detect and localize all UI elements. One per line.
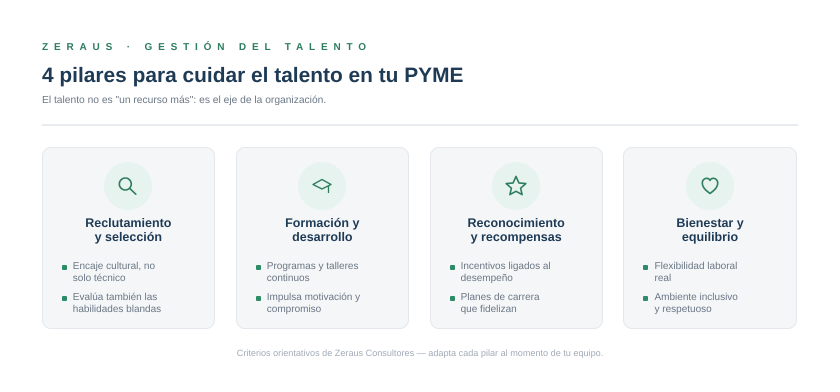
eyebrow: ZERAUS · GESTIÓN DEL TALENTO (42, 42, 372, 52)
heading: bienestar: Bienestar y (676, 216, 744, 230)
bullet text 1: Incentivos ligados al (461, 261, 551, 272)
bullet text 1: real (654, 273, 671, 284)
heading: reconocimiento (468, 216, 565, 244)
bullet text 2: Evalúa también las (73, 292, 157, 303)
bullet text 1: Flexibilidad laboral (654, 261, 737, 272)
subtitle: El talento no es "un recurso más": es el eje de la organización. (42, 95, 326, 106)
bullet text 2 (73, 292, 161, 315)
icon: graduation cap (298, 162, 346, 210)
bullet text 2: que fidelizan (461, 304, 517, 315)
bullet text 1 (461, 261, 551, 284)
panel: reconocimiento y recompensas (430, 147, 603, 329)
bullet text 2 (654, 292, 738, 315)
bullet text 2: Ambiente inclusivo (654, 292, 738, 303)
heading: reclutamiento: Reclutamiento (85, 216, 171, 230)
footer note: Criterios orientativos de Zeraus Consultores — adapta cada pilar al momento de tu equipo. (237, 348, 603, 358)
bullet text 2: Impulsa motivación y (267, 292, 360, 303)
title: 4 pilares para cuidar el talento en tu PYME (42, 64, 463, 87)
heading: reclutamiento: y selección (95, 230, 162, 244)
bullet text 2: y respetuoso (654, 304, 712, 315)
bullet text 2: habilidades blandas (73, 304, 161, 315)
icon: star (492, 162, 540, 210)
panel: reclutamiento y selección (42, 147, 215, 329)
heading: formación: desarrollo (292, 230, 353, 244)
bullet text 1: desempeño (461, 273, 513, 284)
panel: bienestar y equilibrio (623, 147, 797, 329)
heading: bienestar (676, 216, 744, 244)
bullet text 1: Programas y talleres (267, 261, 358, 272)
bullet text 1: solo técnico (73, 273, 126, 284)
heading: reconocimiento: Reconocimiento (468, 216, 565, 230)
bullet text 2: compromiso (267, 304, 321, 315)
bullet text 1: Encaje cultural, no (73, 261, 155, 272)
heading: reconocimiento: y recompensas (471, 230, 562, 244)
bullet text 1 (654, 261, 737, 284)
panel: formación y desarrollo (236, 147, 409, 329)
heading: reclutamiento (85, 216, 171, 244)
icon: heart (686, 162, 734, 210)
bullet text 2 (461, 292, 540, 315)
bullet text 1 (267, 261, 358, 284)
bullet text 1: continuos (267, 273, 310, 284)
icon: magnifying glass (104, 162, 152, 210)
bullet text 1 (73, 261, 155, 284)
bullet text 2 (267, 292, 360, 315)
heading: formación (285, 216, 360, 244)
bullet text 2: Planes de carrera (461, 292, 540, 303)
heading: bienestar: equilibrio (682, 230, 738, 244)
heading: formación: Formación y (285, 216, 359, 230)
